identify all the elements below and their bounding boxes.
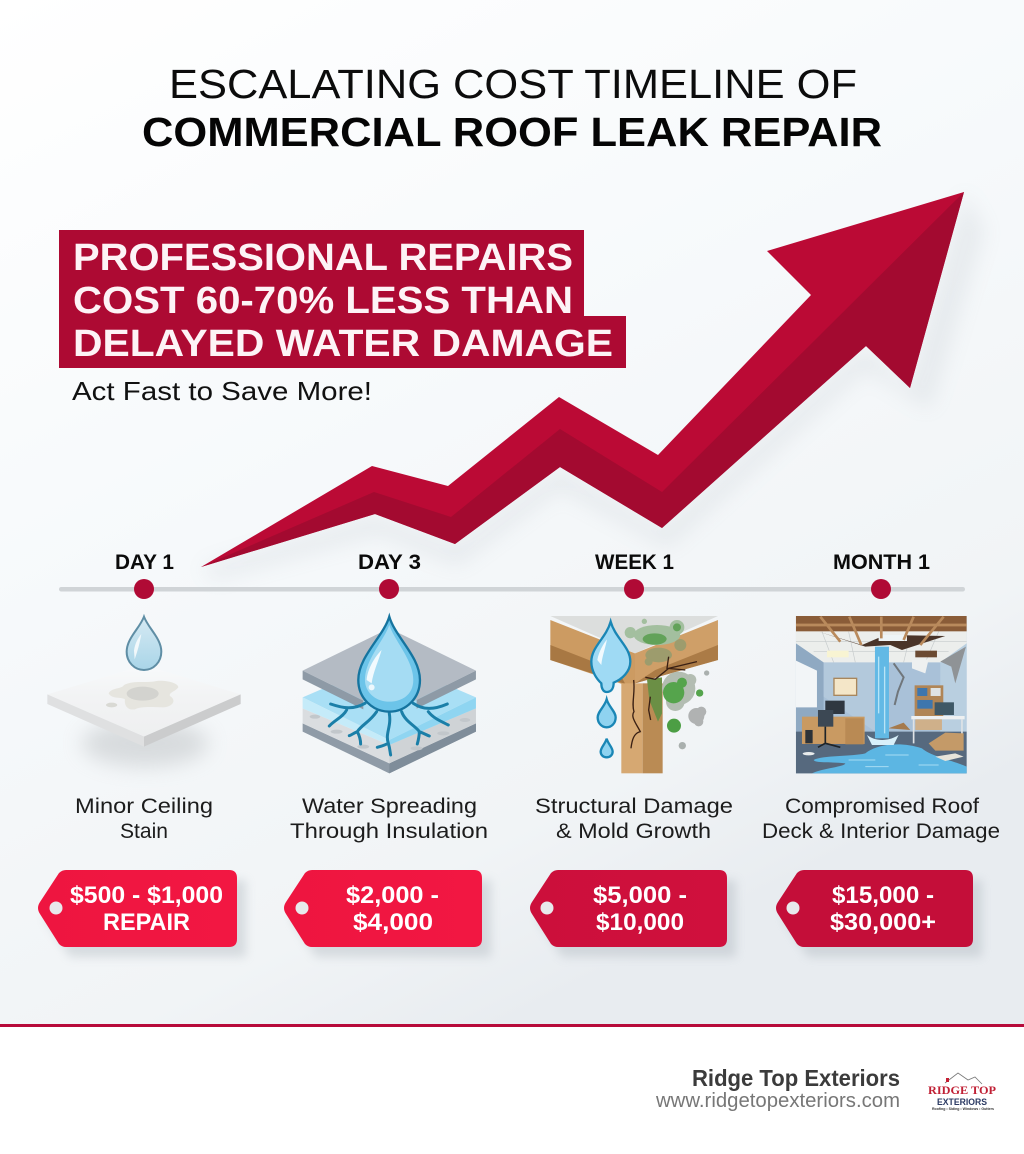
title bbox=[142, 61, 882, 155]
price tag: day 3 bbox=[284, 870, 491, 957]
caption: minor ceiling stain: Stain bbox=[120, 820, 168, 843]
price tag: day 3: $2,000 - bbox=[346, 882, 439, 909]
icon: water spreading through insulation bbox=[303, 617, 476, 773]
footer bbox=[0, 1024, 1024, 1154]
callout banner: DELAYED WATER DAMAGE bbox=[73, 323, 613, 365]
timeline: DAY 1 bbox=[115, 551, 174, 574]
price tag: day 3: $4,000 bbox=[353, 909, 433, 936]
timeline bbox=[59, 551, 965, 599]
caption: structural damage: & Mold Growth bbox=[556, 820, 711, 843]
company name: Ridge Top Exteriors bbox=[692, 1065, 900, 1091]
icon: structural damage and mold bbox=[550, 616, 718, 773]
price tag: week 1 bbox=[530, 870, 736, 957]
callout banner: COST 60-70% LESS THAN bbox=[73, 280, 573, 322]
caption: water spreading bbox=[290, 795, 488, 843]
caption: water spreading: Water Spreading bbox=[302, 795, 477, 818]
timeline: WEEK 1 bbox=[595, 551, 674, 574]
title: COMMERCIAL ROOF LEAK REPAIR bbox=[142, 109, 882, 155]
price tag: week 1: $10,000 bbox=[596, 909, 684, 936]
logo bbox=[928, 1073, 996, 1111]
price tag: month 1: $30,000+ bbox=[830, 909, 936, 936]
timeline: DAY 3 bbox=[358, 551, 421, 574]
rising red arrow bbox=[201, 192, 985, 580]
caption: compromised roof deck: Deck & Interior Damage bbox=[762, 820, 1000, 843]
price tag: day 1: $500 - $1,000 bbox=[70, 882, 223, 909]
caption: minor ceiling stain bbox=[75, 795, 213, 843]
caption: structural damage bbox=[535, 795, 733, 843]
price tag: day 1: REPAIR bbox=[103, 909, 190, 936]
callout banner bbox=[59, 230, 626, 368]
logo: Roofing • Siding • Windows • Gutters bbox=[932, 1107, 994, 1111]
caption: water spreading: Through Insulation bbox=[290, 820, 488, 843]
caption: compromised roof deck: Compromised Roof bbox=[785, 795, 979, 818]
title: ESCALATING COST TIMELINE OF bbox=[169, 61, 857, 107]
price tag: month 1 bbox=[776, 870, 982, 957]
callout banner: PROFESSIONAL REPAIRS bbox=[73, 237, 573, 279]
sub-headline: Act Fast to Save More! bbox=[72, 376, 372, 406]
price tag: week 1: $5,000 - bbox=[593, 882, 687, 909]
icon: office interior flood bbox=[796, 616, 967, 773]
caption: minor ceiling stain: Minor Ceiling bbox=[75, 795, 213, 818]
icon: ceiling stain with drop bbox=[47, 617, 241, 767]
price tag: month 1: $15,000 - bbox=[832, 882, 934, 909]
caption: structural damage: Structural Damage bbox=[535, 795, 733, 818]
timeline: MONTH 1 bbox=[833, 551, 930, 574]
logo: EXTERIORS bbox=[937, 1097, 987, 1107]
price tag: day 1 bbox=[38, 870, 246, 957]
logo: RIDGE TOP bbox=[928, 1083, 996, 1097]
website: www.ridgetopexteriors.com bbox=[655, 1090, 900, 1112]
caption: compromised roof deck bbox=[762, 795, 1000, 843]
